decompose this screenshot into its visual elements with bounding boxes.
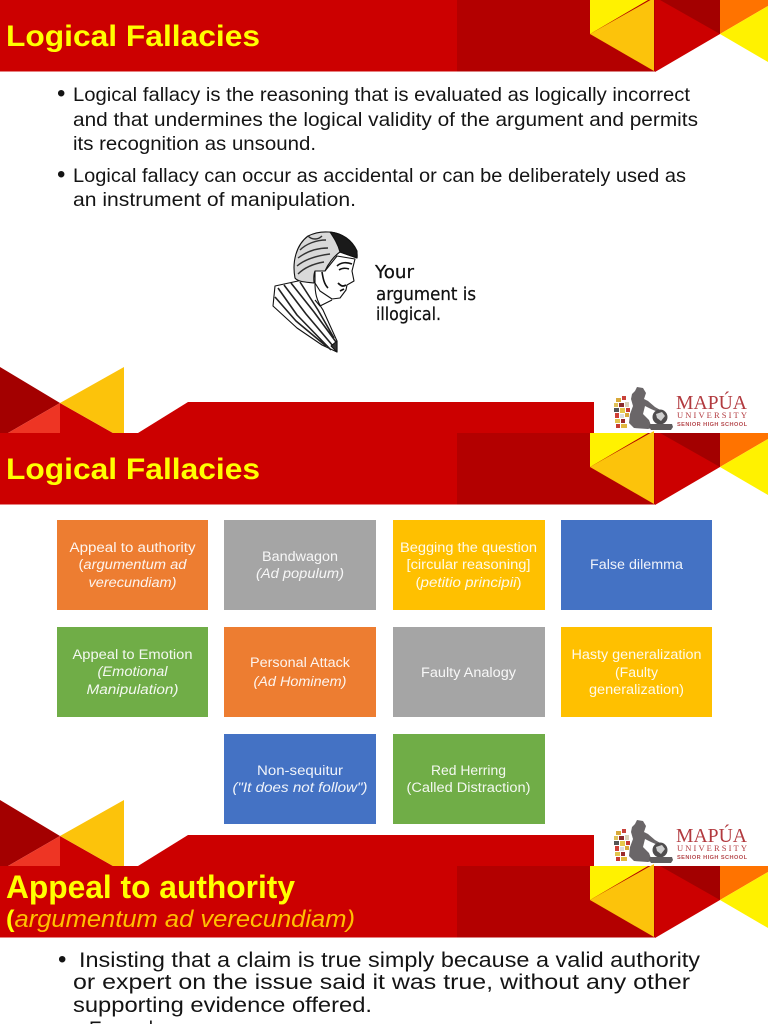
slide 3 title: (argumentum ad verecundiam): [6, 906, 355, 933]
box: appeal to emotion: [57, 627, 208, 717]
logo: Mapua University: MAPÚA: [676, 390, 748, 414]
box: hasty generalization: [561, 627, 712, 717]
slide 2 header band: [0, 431, 768, 505]
slide 1 title: Logical Fallacies: [6, 20, 260, 53]
box: begging the question: Begging the question: [400, 540, 537, 555]
slide 1 definition text: •: [57, 80, 65, 107]
logo: Mapua University: SENIOR HIGH SCHOOL: [677, 422, 748, 428]
logo: Mapua University: UNIVERSITY: [677, 410, 747, 420]
box: appeal to emotion: (Emotional: [98, 664, 169, 679]
fallacy grid: [57, 520, 712, 824]
logo: Mapua University (slide 2): SENIOR HIGH SCHOOL: [677, 855, 748, 861]
slide 1 definition text: an instrument of manipulation.: [73, 189, 356, 211]
logo: Mapua University: [614, 387, 748, 430]
slide 1 definition text: and that undermines the logical validity of the argument and permits: [73, 109, 698, 131]
slide 2 title: Logical Fallacies: [6, 453, 260, 486]
box: faulty analogy: [393, 627, 545, 717]
slide 3 title: [6, 869, 355, 933]
handwritten caption: Your: [374, 263, 415, 283]
box: bandwagon: (Ad populum): [256, 566, 344, 581]
slide 3 title: Appeal to authority: [6, 869, 295, 905]
slide 3 body text: supporting evidence offered.: [73, 993, 372, 1017]
handwritten caption: [374, 263, 476, 325]
slide 3 body text: or expert on the issue said it was true, without any other: [73, 970, 690, 994]
slide 1 definition text: [57, 80, 698, 211]
slide 1 definition text: Logical fallacy is the reasoning that is evaluated as logically incorrect: [73, 84, 691, 106]
logo: Mapua University (slide 2): UNIVERSITY: [677, 843, 747, 853]
handwritten caption: illogical.: [376, 305, 441, 325]
slide 3 body text: •: [58, 946, 66, 973]
box: non-sequitur: [224, 734, 376, 824]
slide 1 definition text: •: [57, 161, 65, 188]
logo: Mapua University (slide 2): [614, 820, 748, 863]
slide 1 footer graphics: [0, 367, 594, 433]
box: bandwagon: [224, 520, 376, 610]
box: personal attack: [224, 627, 376, 717]
box: personal attack: Personal Attack: [250, 655, 350, 670]
box: begging the question: (petitio principii ): [416, 575, 522, 590]
icon: philosopher bust: [273, 232, 357, 352]
box: hasty generalization: (Faulty: [615, 665, 658, 680]
box: red herring: Red Herring: [431, 763, 506, 778]
slide 1 header band: [0, 0, 768, 72]
box: hasty generalization: generalization): [589, 682, 684, 697]
box: faulty analogy: Faulty Analogy: [421, 665, 516, 680]
box: bandwagon: Bandwagon: [262, 549, 338, 564]
box: begging the question: [393, 520, 545, 610]
box: hasty generalization: Hasty generalization: [572, 647, 702, 662]
slide 3 body text: Insisting that a claim is true simply because a valid authority: [79, 948, 700, 972]
slide 1 definition text: its recognition as unsound.: [73, 133, 316, 155]
box: appeal to authority: Appeal to authority: [70, 540, 196, 555]
illustration: philosopher bust with speech text: [273, 232, 476, 352]
slide 3 header band: [0, 864, 768, 938]
box: non-sequitur: ("It does not follow"): [232, 780, 368, 795]
box: appeal to emotion: Appeal to Emotion: [72, 647, 192, 662]
box: red herring: [393, 734, 545, 824]
box: personal attack: (Ad Hominem): [254, 674, 346, 689]
slide 3 body text: [58, 946, 700, 1024]
box: appeal to authority: verecundiam): [88, 575, 176, 590]
slide 2 footer graphics: [0, 800, 594, 866]
box: appeal to authority: (argumentum ad: [78, 557, 187, 572]
box: false dilemma: False dilemma: [590, 557, 684, 572]
box: red herring: (Called Distraction): [406, 780, 530, 795]
box: begging the question: [circular reasoning]: [406, 557, 530, 572]
box: non-sequitur: Non-sequitur: [257, 763, 344, 778]
box: false dilemma: [561, 520, 712, 610]
box: appeal to emotion: Manipulation): [86, 682, 178, 697]
slide 1 definition text: Logical fallacy can occur as accidental or can be deliberately used as: [73, 165, 686, 187]
box: appeal to authority: [57, 520, 208, 610]
logo: Mapua University (slide 2): MAPÚA: [676, 823, 748, 847]
handwritten caption: argument is: [376, 285, 476, 305]
